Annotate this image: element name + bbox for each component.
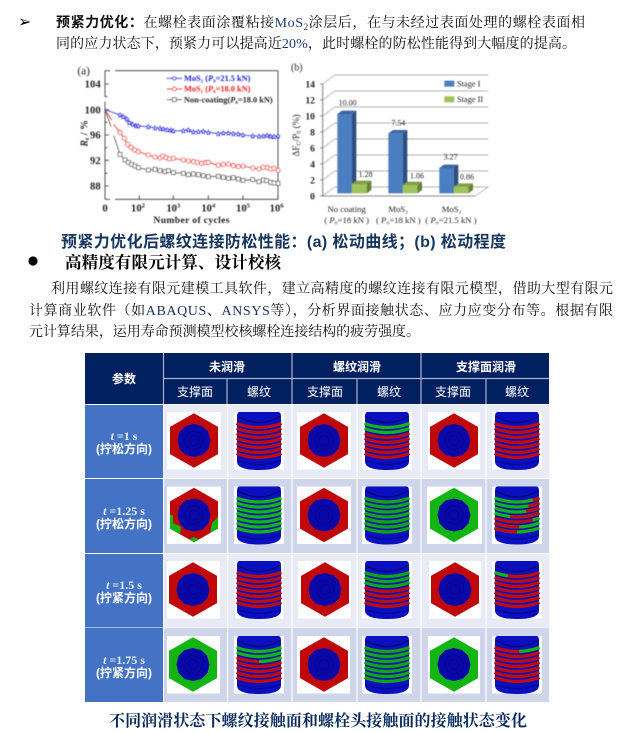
header separators — [163, 353, 549, 404]
row label 4 — [85, 628, 163, 702]
bar: MoS2 21.5 kN stage II — [454, 183, 473, 193]
r3 thread no lube: red — [235, 561, 283, 619]
thread: 螺纹 — [505, 385, 529, 399]
series: MoS2 18 kN — [105, 110, 278, 170]
row label 1 — [85, 405, 163, 478]
axes — [105, 71, 278, 199]
row 1 images — [167, 412, 542, 470]
legend: blue: MoS₂ (P₀=21.5 kN) — [184, 74, 251, 83]
y axis title: 0 — [297, 131, 303, 134]
10^3: 10 — [166, 203, 177, 214]
10^3: 3 — [177, 202, 181, 209]
8: 8 — [310, 127, 315, 138]
row label 3: (拧紧方向) — [96, 590, 152, 605]
MoS2: MoS₂ — [388, 204, 408, 214]
bar: no coating stage I — [337, 111, 356, 193]
10^6: 6 — [280, 202, 284, 209]
0: 0 — [310, 191, 315, 202]
10^4: 10 — [201, 203, 212, 214]
P0 18 kN: ( P₀=18 kN ) — [376, 215, 421, 225]
r2 bearing thread lube: red — [297, 486, 351, 544]
r1 bearing no lube: red — [167, 412, 221, 470]
x tick labels — [102, 202, 284, 214]
bar: MoS2 21.5 kN stage I — [439, 165, 458, 193]
row label 2: t =1.25 s — [103, 504, 145, 518]
header background — [85, 353, 549, 404]
line 2: 计算商业软件（如ABAQUS、ANSYS等），分析界面接触状态、应力应变分布等。根据有限 — [29, 302, 613, 319]
heading: finite element: 高精度有限元计算、设计校核 — [65, 252, 282, 272]
bar value labels — [339, 98, 474, 182]
bullet: dot — [28, 256, 38, 266]
text block: preload optimisation — [56, 14, 585, 52]
line 1: 2 — [304, 22, 308, 32]
0: 0 — [102, 203, 108, 214]
bullet: arrow: ➢ — [18, 12, 31, 31]
10^4: 4 — [212, 202, 216, 209]
row 3 images — [167, 561, 542, 619]
r1 thread no lube: red — [234, 412, 284, 470]
12: 12 — [305, 95, 315, 106]
r4 bearing bearing lube: green — [428, 636, 480, 694]
y axis title: C — [297, 141, 303, 145]
4: 4 — [310, 159, 315, 170]
table: contact state — [85, 353, 549, 702]
axis ticks — [105, 84, 278, 199]
r1 thread bearing lube: red — [492, 412, 542, 470]
r2 thread bearing lube: mixed — [492, 486, 542, 544]
chart b: loosening degree — [291, 63, 488, 225]
bar: no coating stage II — [352, 181, 371, 193]
thread: 螺纹 — [247, 385, 271, 399]
r4 bearing thread lube: red — [297, 636, 350, 694]
r4 thread no lube: green top, red bottom — [234, 636, 284, 694]
y axis title: (%) — [291, 114, 302, 131]
y axis title: /P — [292, 134, 302, 141]
row label 1: t =1 s — [111, 429, 138, 443]
row label 3 — [85, 554, 163, 628]
10^6: 10 — [270, 203, 280, 214]
P0 18 kN: ( P₀=18 kN ) — [324, 215, 369, 225]
panel tag b: (b) — [291, 63, 303, 74]
row label 1: (拧松方向) — [96, 441, 152, 456]
r1 bearing thread lube: red — [297, 412, 351, 470]
series: MoS2 21.5 kN — [105, 110, 278, 137]
r2 bearing no lube: red with green patches — [167, 486, 221, 544]
row 4 images — [167, 636, 542, 694]
no lube: 未润滑 — [209, 359, 245, 374]
r4 thread thread lube: green — [362, 636, 412, 694]
row label 2: (拧松方向) — [96, 516, 152, 531]
92: 92 — [90, 156, 101, 167]
legend: red: MoS₂ (P₀=18.0 kN) — [184, 85, 251, 94]
r4 thread bearing lube: mostly red — [492, 636, 542, 694]
No coating: No coating — [328, 204, 366, 214]
legend: gray: Non-coating(P₀=18.0 kN) — [184, 95, 273, 104]
r3 bearing bearing lube: red — [429, 561, 481, 618]
row 2 images — [167, 486, 542, 544]
6: 6 — [310, 143, 315, 154]
r3 bearing no lube: red — [167, 561, 220, 618]
thread lube: 螺纹润滑 — [333, 359, 381, 374]
r3 thread bearing lube: red — [492, 561, 542, 619]
line 2: 同的应力状态下，预紧力可以提高近20%，此时螺栓的防松性能得到大幅度的提高。 — [56, 35, 576, 52]
panel tag a: (a) — [77, 65, 90, 77]
chart a: loosening curves — [77, 65, 284, 226]
100: 100 — [85, 105, 101, 116]
y tick labels — [85, 80, 101, 193]
header labels — [112, 359, 529, 399]
1.06: 1.06 — [410, 172, 424, 181]
grid and floor — [323, 75, 488, 196]
104: 104 — [85, 80, 101, 91]
bar: MoS2 18 kN stage II — [403, 182, 422, 193]
line 1: 涂层后，在与未经过表面处理的螺栓表面相 — [309, 14, 585, 31]
legend — [167, 74, 273, 104]
caption: figure 2: 不同润滑状态下螺纹接触面和螺栓头接触面的接触状态变化 — [109, 711, 527, 730]
14: 14 — [305, 79, 315, 90]
line 1: 利用螺纹连接有限元建模工具软件，建立高精度的螺纹连接有限元模型，借助大型有限元 — [51, 280, 613, 297]
1.28: 1.28 — [359, 170, 373, 179]
10^2: 10 — [131, 203, 142, 214]
r1 bearing bearing lube: red — [428, 412, 480, 470]
2: 2 — [310, 175, 315, 186]
10^5: 5 — [247, 202, 251, 209]
96: 96 — [90, 131, 101, 142]
paragraph: finite element — [29, 280, 613, 340]
series: non-coating — [105, 110, 278, 183]
x axis title: Number of cycles — [153, 215, 230, 226]
0.86: 0.86 — [460, 173, 474, 182]
y axis title: t — [84, 137, 91, 140]
10^5: 10 — [236, 203, 247, 214]
bearing lube: 支撑面润滑 — [456, 359, 516, 374]
y axis title: / % — [79, 120, 90, 138]
parameter: 参数 — [112, 371, 136, 386]
r2 thread thread lube: green — [362, 486, 412, 544]
10.00: 10.00 — [339, 98, 357, 107]
88: 88 — [90, 182, 101, 193]
row backgrounds — [164, 405, 549, 702]
legend: stage I: Stage I — [457, 79, 481, 88]
7.54: 7.54 — [391, 118, 405, 127]
r1 thread thread lube: green top — [362, 412, 412, 470]
bearing: 支撑面 — [177, 384, 213, 399]
row label 4: (拧紧方向) — [96, 665, 152, 680]
legend: stage II: Stage II — [457, 95, 483, 104]
r2 bearing bearing lube: green — [427, 486, 482, 544]
10: 10 — [305, 111, 315, 122]
P0 21.5 kN: ( P₀=21.5 kN ) — [425, 215, 477, 225]
line 3: 元计算结果，运用寿命预测模型校核螺栓连接结构的疲劳强度。 — [29, 323, 420, 340]
line 1: 预紧力优化：在螺栓表面涂覆粘接MoS — [56, 14, 303, 31]
bearing: 支撑面 — [435, 384, 471, 399]
r3 thread thread lube: green top, red bottom — [362, 561, 412, 619]
y tick labels — [305, 79, 315, 202]
MoS2: MoS₂ — [442, 204, 462, 214]
legend — [444, 79, 483, 104]
bar: MoS2 18 kN stage I — [388, 130, 407, 193]
row label 4: t =1.75 s — [103, 653, 145, 667]
y axis title: R — [79, 140, 90, 148]
row label 2 — [85, 479, 163, 553]
3.27: 3.27 — [444, 153, 458, 162]
bearing: 支撑面 — [307, 384, 343, 399]
y axis title: ΔF — [292, 145, 302, 157]
r2 thread no lube: green — [234, 486, 284, 544]
axes — [320, 84, 475, 196]
r4 bearing no lube: green — [167, 636, 220, 694]
category labels — [324, 204, 477, 225]
r3 bearing thread lube: red — [298, 561, 351, 618]
thread: 螺纹 — [377, 385, 401, 399]
10^2: 2 — [142, 202, 146, 209]
row label 3: t =1.5 s — [106, 578, 142, 592]
caption: figure 1: 预紧力优化后螺纹连接防松性能：(a) 松动曲线；(b) 松动程度 — [61, 232, 506, 251]
